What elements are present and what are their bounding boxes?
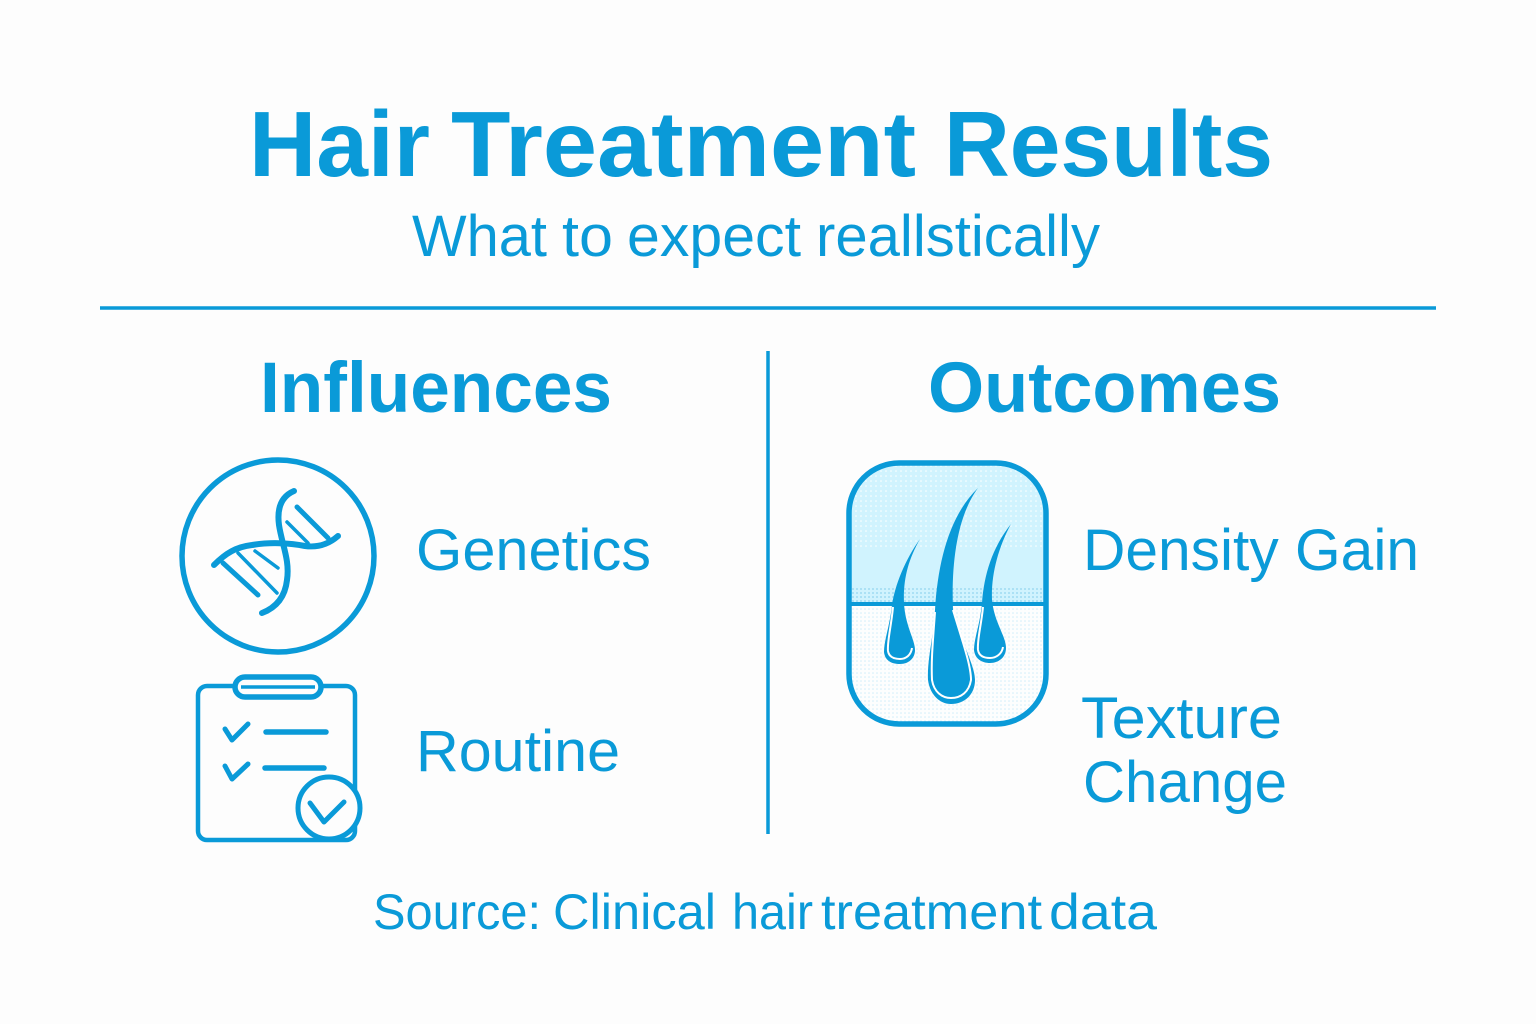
source note: hair — [732, 884, 813, 940]
title: Hair — [249, 92, 430, 196]
title: Results — [944, 92, 1273, 196]
label: texture change: Texture — [1081, 686, 1282, 751]
subtitle: What — [412, 204, 547, 269]
hair: left — [884, 539, 920, 664]
heading: influences: Influences — [260, 349, 612, 428]
icon: clipboard checklist — [198, 677, 360, 840]
label: genetics: Genetics — [416, 518, 651, 583]
hair: center — [928, 488, 978, 704]
source note: Source: — [373, 884, 541, 940]
panel: outcomes — [848, 349, 1419, 815]
label: texture change: Change — [1083, 750, 1287, 815]
icon: DNA in circle — [182, 460, 374, 652]
label: texture change — [1081, 686, 1287, 815]
label: routine: Routine — [416, 719, 620, 784]
source note: Clinical — [553, 884, 716, 940]
subtitle: expect — [627, 204, 801, 269]
title: Treatment — [451, 92, 916, 196]
icon: hair follicles — [848, 462, 1047, 725]
subtitle: reallstically — [816, 204, 1100, 269]
source note: data — [1049, 884, 1157, 940]
panel: influences — [182, 349, 651, 840]
hair: right — [974, 524, 1011, 663]
label: density gain: Density Gain — [1083, 518, 1419, 583]
source note: treatment — [821, 884, 1042, 940]
heading: outcomes: Outcomes — [928, 349, 1281, 428]
subtitle: to — [562, 204, 613, 269]
